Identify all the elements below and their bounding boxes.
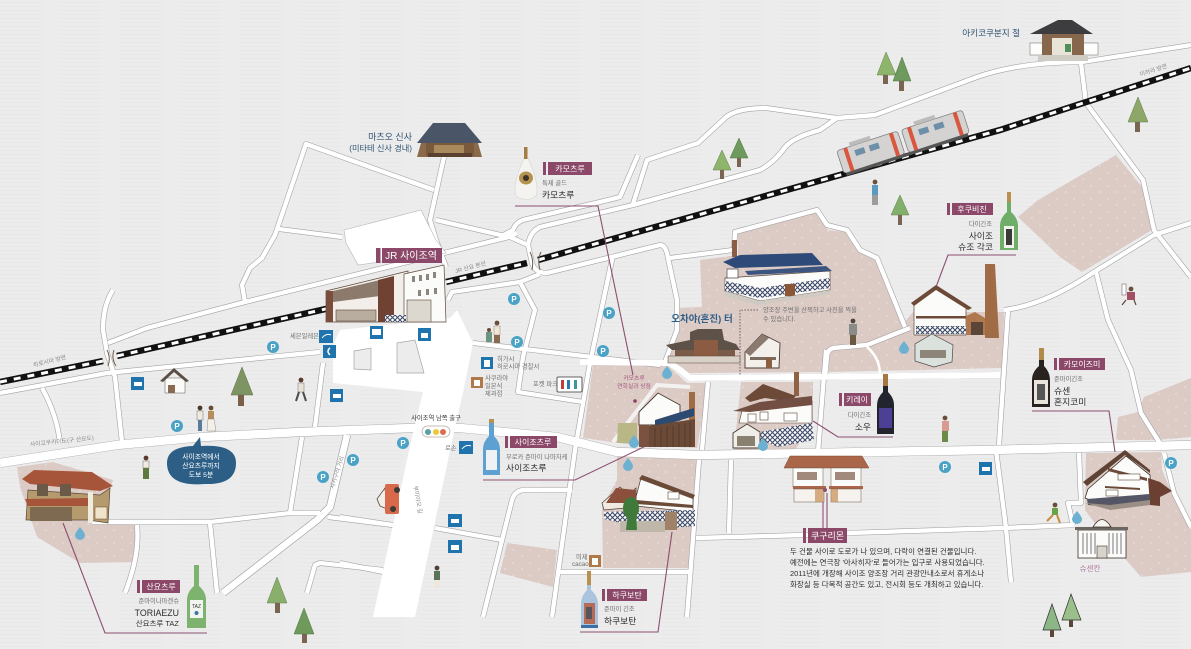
heading: JR Saijo station: JR 사이조역 (385, 250, 437, 262)
small annotations: 포켓 파크 (533, 379, 558, 388)
label: Kamoizumi: 혼지코미 (1054, 396, 1086, 407)
building: Kugurimon gate (784, 456, 869, 502)
panel: Kugurimon description: 화장실 등 다목적 공간도 있고, 전시회 등도 개최하고 있습니다. (790, 579, 983, 589)
parking markers: P (270, 343, 276, 352)
label: Hakubotan: 준마이 긴조 (604, 604, 635, 613)
building: Sanyotsuru brewery (22, 470, 113, 523)
building: Kirei brewery (733, 372, 814, 448)
label: Sanyotsuru: 산요츠루 TAZ (136, 618, 179, 628)
people (143, 180, 1136, 588)
label: Fukubijin: 슈조 각코 (958, 241, 993, 252)
parking markers: P (174, 422, 180, 431)
label: Fukubijin: 다이긴조 (969, 219, 992, 228)
place names: 오차야(혼진) 터 (671, 313, 733, 325)
road and rail labels: 히로시마 방면 (32, 353, 67, 369)
Kamotsuru courtyard path and garden (613, 385, 690, 443)
label: Sanyotsuru: 산요츠루 (146, 582, 176, 592)
small annotations: 사쿠라야 (485, 373, 508, 382)
callout: walking time: 산요츠루까지 (182, 461, 220, 470)
panel: Kugurimon description (790, 528, 985, 589)
label: Saijotsuru: 사이조츠루 (506, 463, 546, 473)
label: Kamoizumi (1054, 358, 1105, 407)
label: Kirei (839, 393, 871, 432)
label: Kamoizumi: 준마이긴조 (1054, 374, 1083, 383)
small annotations: 로손 (445, 444, 457, 452)
facility icons (131, 326, 992, 553)
label: Fukubijin: 사이조 (969, 231, 993, 241)
parking markers: P (350, 456, 356, 465)
callout: walking time (167, 437, 236, 484)
sake bottle: TORIAEZU TAZ (187, 565, 206, 628)
road and rail labels: 미하라 방면 (1139, 62, 1168, 78)
small annotations: 미제 (576, 552, 588, 561)
place names: 마츠오 신사 (368, 132, 413, 142)
label: Kirei: 키레이 (846, 394, 868, 404)
sake bottle: Kirei (877, 374, 894, 434)
railway line (0, 68, 1191, 382)
building: Ochaya honjin site (666, 329, 740, 363)
place names: 카모츠루 (623, 374, 645, 382)
label: Fukubijin: 후쿠비진 (957, 204, 987, 214)
building: Hakubotan brewery (602, 475, 695, 532)
small annotations: 히로시마 경찰서 (497, 362, 539, 370)
label: Saijotsuru: 무로카 준마이 나마자케 (506, 452, 568, 461)
road and rail labels: 사카구라 거리 (328, 455, 346, 490)
trees (231, 52, 1148, 643)
place names: (미타테 신사 경내) (349, 143, 412, 153)
sake bottle: Hakubotan (581, 571, 598, 628)
label: Saijotsuru (505, 436, 568, 473)
station plaza and wide south road (333, 210, 473, 617)
illustration: train (835, 106, 970, 176)
parking markers: P (1168, 459, 1174, 468)
road and rail labels: 부미야오 길 (412, 485, 424, 514)
label: Fukubijin (947, 203, 993, 252)
building: Kamoizumi brewery (1083, 450, 1172, 510)
label: Sanyotsuru (135, 580, 180, 628)
place names: 연회실과 상점 (617, 382, 651, 390)
building: Shusenkan (1075, 520, 1128, 558)
road and rail labels: JR 산요 본선 (454, 259, 487, 275)
panel: Kugurimon description: 2011년에 개장해 사이조 양조장 거리 관광안내소로서 휴게소나 (790, 568, 984, 578)
parking markers: P (511, 295, 517, 304)
small annotations: 히가시 (497, 354, 514, 363)
building: brewery with blue roof (723, 240, 832, 305)
parking markers: P (514, 338, 520, 347)
label: Kirei: 다이긴조 (848, 410, 871, 419)
panel: Kugurimon description: 예전에는 연극장 '아사히자'로 들어가는 입구로 사용되었습니다. (790, 557, 985, 567)
callout: walking time: 도보 5분 (189, 471, 213, 479)
sake bottle: TORIAEZU TAZ: TAZ (192, 604, 201, 610)
label: Kamotsuru: 카모츠루 (555, 164, 585, 174)
heading: JR Saijo station (376, 248, 442, 263)
parking markers: P (320, 473, 326, 482)
place names: 사이조역 남쪽 출구 (411, 413, 461, 422)
building: JR Saijo station (326, 265, 446, 322)
building: Kamotsuru brewery (639, 392, 695, 447)
leader lines (63, 206, 1115, 633)
label: Sanyotsuru: 준마이나마겐슈 (138, 596, 179, 605)
small annotations: 수 있습니다. (763, 314, 796, 323)
road and rail labels: 사이고쿠카이도(구 산요도) (29, 434, 94, 448)
small annotations: cacao (572, 561, 589, 568)
water drops (75, 341, 1082, 540)
label: Hakubotan: 하쿠보탄 (612, 590, 642, 600)
small annotations: 양조장 주변을 산책하고 사진을 찍을 (763, 305, 857, 314)
panel: Kugurimon description: 두 건물 사이로 도로가 나 있으며, 다락이 연결된 건물입니다. (790, 546, 976, 556)
place names: 슈센칸 (1080, 563, 1100, 573)
pink brewery districts (17, 155, 1191, 587)
building: Fukubijin brewery (911, 264, 999, 367)
parking markers: P (942, 463, 948, 472)
place names: 아키코쿠분지 절 (962, 28, 1020, 38)
small annotations: 제과점 (485, 388, 502, 398)
place names (349, 28, 1100, 573)
label: Sanyotsuru: TORIAEZU (135, 608, 179, 618)
building: Akikokubunji temple (1030, 20, 1098, 61)
sake bottle: Kamotsuru gourd (515, 147, 537, 200)
label: Kamotsuru: 카모츠루 (542, 190, 574, 200)
label: Kirei: 소우 (855, 422, 871, 432)
label: Saijotsuru: 사이조츠루 (515, 437, 551, 447)
panel: Kugurimon description: 쿠구리몬 (811, 531, 844, 541)
sake bottle: Saijotsuru (483, 419, 500, 475)
label: Kamotsuru: 특제 골드 (542, 179, 567, 187)
small annotations: 세븐일레븐 (290, 331, 319, 340)
label: Kamotsuru (542, 162, 592, 200)
parking markers: P (400, 439, 406, 448)
illustration: red car (377, 484, 400, 514)
small annotations (290, 305, 857, 568)
parking markers: P (606, 309, 612, 318)
label: Kamoizumi: 슈센 (1054, 386, 1070, 396)
building: Matsuo shrine (417, 123, 482, 157)
parking markers (171, 293, 1177, 483)
building: small heritage house (745, 334, 780, 368)
road and rail labels (29, 62, 1168, 514)
callout: walking time: 사이조역에서 (182, 452, 220, 461)
small annotations: 일본식 (485, 381, 502, 390)
sake bottle: Fukubijin (1000, 192, 1018, 250)
parking markers: P (600, 347, 606, 356)
traffic light (422, 426, 450, 437)
label: Hakubotan: 하쿠보탄 (604, 616, 636, 626)
illustration: small house (160, 368, 189, 393)
sake bottle: Kamoizumi (1032, 348, 1050, 407)
label: Hakubotan (602, 589, 647, 626)
label: Kamoizumi: 카모이즈미 (1064, 359, 1100, 369)
